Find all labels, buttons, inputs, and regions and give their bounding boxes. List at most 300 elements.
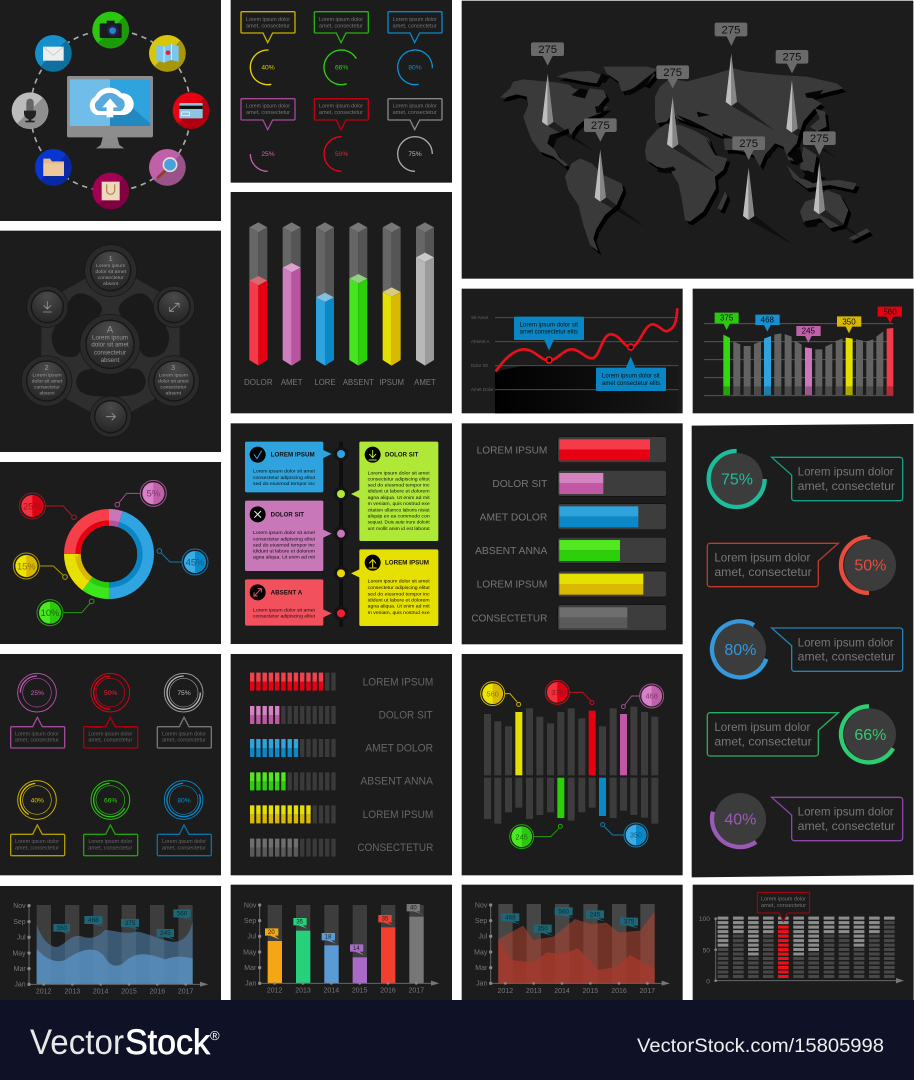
value tags: 245 <box>160 930 171 937</box>
gauge: 40% yellow: 40% <box>31 797 44 804</box>
callout: red 50%: amet, consectetur <box>319 110 363 116</box>
label 468 <box>621 684 664 709</box>
box: dolor sit pink: agna aliqua. Ut enim ad mit <box>253 555 316 561</box>
gauge: 66% green: amet, consectetur <box>88 845 133 851</box>
callout: yellow 40%: 40% <box>261 65 275 72</box>
pin: australia: 275 <box>810 133 829 145</box>
callout: grey 75% <box>388 99 442 171</box>
node: A: dolor sit amet <box>91 343 129 349</box>
coloured bars <box>723 328 893 395</box>
axes: 2015 <box>121 989 137 996</box>
label 350 <box>601 823 648 847</box>
callout: blue 80% <box>388 12 442 88</box>
logo: ® <box>210 1028 220 1043</box>
box: lorem ipsum blue <box>245 442 332 492</box>
node: 2: absent <box>39 390 55 395</box>
column: lore <box>314 222 336 387</box>
node: 3: consectetur <box>160 384 187 389</box>
panel: horizontal progress bars <box>462 423 683 644</box>
panel: line chart <box>462 289 683 413</box>
axes: May <box>12 950 26 957</box>
box: dolor sit green: sed do eiusmod tempor inc <box>368 483 430 489</box>
value tags: 245 <box>590 911 601 918</box>
row: absent anna <box>475 537 667 563</box>
value tags: 468 <box>88 917 99 924</box>
label 10%: 10% <box>41 608 59 618</box>
node: 1: Lorem ipsum <box>96 263 125 268</box>
row: lorem ipsum <box>250 676 433 688</box>
axes: Jan <box>14 982 26 989</box>
axes: Jan <box>476 981 487 988</box>
pin: russia <box>715 23 775 131</box>
node: A: Lorem ipsum <box>92 335 128 341</box>
gauge: 80% blue: Lorem ipsum dolor <box>162 839 206 845</box>
node: arrow icon <box>90 396 131 437</box>
row: amet dolor <box>480 504 667 530</box>
column: amet: AMET <box>281 377 302 387</box>
panel: equalizer chart <box>693 885 914 1000</box>
grid lines <box>495 318 678 390</box>
box: lorem ipsum blue: LOREM IPSUM <box>271 452 315 459</box>
grey bars <box>484 707 658 824</box>
panel: percentage discs with callouts <box>692 424 913 877</box>
axes: Nov <box>13 903 26 910</box>
axis labels: Sit Amet <box>471 315 489 320</box>
label 10% <box>37 599 94 626</box>
item: 75% teal: 75% <box>721 472 753 489</box>
callout lower: Lorem ipsum dolor sit <box>602 374 660 380</box>
callout: green 66%: 66% <box>335 65 348 72</box>
axes: 2017 <box>178 989 194 996</box>
row: lorem ipsum <box>477 571 667 597</box>
front area <box>37 949 193 984</box>
axes: 2014 <box>93 989 109 996</box>
box: lorem ipsum yellow: Lorem ipsum dolor sit amet <box>368 579 430 585</box>
logo: Vector <box>30 1023 124 1062</box>
node: download icon <box>27 286 68 327</box>
axis labels <box>471 315 494 392</box>
item: 50% red <box>707 537 897 593</box>
row: lorem ipsum: LOREM IPSUM <box>477 445 547 456</box>
node: 1 <box>85 245 137 297</box>
item: 50% red: Lorem ipsum dolor <box>714 552 810 565</box>
pin: russia: 275 <box>722 24 740 36</box>
label 245 <box>510 824 562 849</box>
item: 40% purple: amet, consectetur <box>798 820 895 833</box>
row: amet dolor <box>250 743 433 755</box>
value tags: 40 <box>410 906 417 912</box>
callout: grey 75%: 75% <box>408 151 422 158</box>
axes: May <box>474 949 488 956</box>
callout lower <box>596 357 666 391</box>
label 25% <box>19 493 76 520</box>
red curve <box>496 308 677 372</box>
gauge: 50% red <box>84 673 138 748</box>
axes: Mar <box>244 965 257 972</box>
axes: Jul <box>17 935 26 942</box>
markers <box>546 344 634 363</box>
item: 66% green <box>707 696 907 773</box>
node: 2: consectetur <box>34 384 60 389</box>
value tags: 35 <box>296 920 304 926</box>
gauge: 80% blue <box>157 779 211 856</box>
column: amet: AMET <box>414 377 436 387</box>
row: dolor sit <box>250 709 433 721</box>
node: 1: 1 <box>109 254 113 263</box>
panel: mirrored bar chart <box>462 654 683 875</box>
callout: grey 75%: amet, consectetur <box>393 110 437 116</box>
callout: pink 25% <box>241 99 295 171</box>
box: dolor sit green: aliquip ex ea commodo con <box>368 513 430 519</box>
icon: credit card <box>173 92 209 129</box>
label 375: 375 <box>551 688 563 697</box>
column segments <box>723 917 889 979</box>
pin: africa: 275 <box>663 67 682 79</box>
axes: 0 <box>706 979 710 986</box>
callout: blue 80%: Lorem ipsum dolor <box>393 17 437 23</box>
box: dolor sit pink: Lorem ipsum dolor sit amet <box>253 530 316 536</box>
callout upper <box>514 317 584 351</box>
item: 80% blue: Lorem ipsum dolor <box>798 636 894 649</box>
value tags: 350 <box>537 926 548 933</box>
gauge: 80% blue: 80% <box>177 797 191 804</box>
row: amet dolor: AMET DOLOR <box>365 743 433 755</box>
box: dolor sit green: agna aliqua. Ut enim ad mit <box>368 495 430 501</box>
icon: microphone <box>12 92 48 129</box>
panel: ring gauges <box>0 654 221 875</box>
gauge: 25% pink: 25% <box>31 690 44 697</box>
column: absent <box>343 222 374 387</box>
panel: 3d column chart <box>231 192 452 413</box>
tag 245 <box>796 326 821 343</box>
dark base area <box>495 366 678 413</box>
tag 468 <box>755 315 780 332</box>
callout: red 50% <box>314 99 368 171</box>
column: dolor: DOLOR <box>244 377 273 387</box>
box: dolor sit pink: DOLOR SIT <box>271 511 304 518</box>
node: 3: Lorem ipsum <box>159 372 188 377</box>
pin: south america: 275 <box>591 120 610 132</box>
value tags <box>53 909 192 940</box>
axes: 2016 <box>150 989 165 996</box>
node: A <box>80 314 140 374</box>
pin: north america: 275 <box>538 44 557 56</box>
box: lorem ipsum yellow: sed do eiusmod tempor inc <box>368 591 430 597</box>
gauge: 50% red: 50% <box>104 690 117 697</box>
callout: blue 80%: amet, consectetur <box>393 23 437 29</box>
value tags: 350 <box>56 925 67 932</box>
front area <box>498 939 655 983</box>
grid lines <box>704 324 893 396</box>
box: dolor sit green: m veniam, quis nostrud exe <box>368 501 430 507</box>
label 350: 350 <box>630 831 642 840</box>
axis labels: Dolor Sit <box>471 363 488 368</box>
column: ipsum: IPSUM <box>379 377 404 387</box>
tag 560: 560 <box>883 308 897 317</box>
pin: east asia <box>776 50 837 158</box>
tag 245: 245 <box>802 327 816 336</box>
pin: south america <box>584 118 645 227</box>
item: 50% red: amet, consectetur <box>714 566 812 579</box>
axes: May <box>243 949 257 956</box>
panel: value bar chart <box>693 289 914 413</box>
box: dolor sit pink: ididunt ut labore et dolorem <box>253 549 315 555</box>
item: 75% teal <box>709 451 903 507</box>
axes: Sep <box>244 918 256 925</box>
callout upper: amet consectetur elits <box>520 330 578 336</box>
item: 75% teal: Lorem ipsum dolor <box>798 466 894 479</box>
callout: pink 25%: Lorem ipsum dolor <box>246 104 290 110</box>
donut <box>72 517 146 591</box>
highlighted bars <box>515 711 627 818</box>
box: dolor sit green <box>351 442 438 541</box>
item: 66% green: 66% <box>854 727 886 744</box>
gauge: 25% pink <box>11 673 65 748</box>
panel: donut chart <box>0 462 221 644</box>
row: absent anna: ABSENT ANNA <box>475 546 547 557</box>
box: dolor sit green: citation ullamco laboris nisiut <box>368 507 430 513</box>
box: dolor sit green: DOLOR SIT <box>385 452 418 459</box>
box: dolor sit pink: sed do eiusmod tempor inc <box>253 542 316 548</box>
grey bars <box>733 331 883 395</box>
tag 350: 350 <box>842 317 856 326</box>
stripes <box>37 905 193 984</box>
box: lorem ipsum blue: sed do eiusmod tempor inc <box>253 481 316 487</box>
axes: Nov <box>475 902 488 909</box>
node: 1: dolor sit amet <box>95 269 127 274</box>
row: absent anna: ABSENT ANNA <box>360 776 434 788</box>
axes: 2012 <box>36 989 52 996</box>
axes: Sep <box>13 919 26 926</box>
axes: Mar <box>14 966 26 973</box>
axes: Jul <box>478 934 488 941</box>
item: 75% teal: amet, consectetur <box>798 480 895 493</box>
pin: africa <box>656 65 717 173</box>
icon: shopping bag <box>92 173 129 209</box>
axes: 2013 <box>65 989 80 996</box>
box: lorem ipsum yellow <box>351 549 438 626</box>
column: ipsum <box>379 222 404 387</box>
icon: monitor with cloud upload <box>67 76 153 148</box>
node: resize icon <box>153 286 195 327</box>
panel: blue area chart <box>0 886 221 1000</box>
gauge: 40% yellow: amet, consectetur <box>15 845 59 851</box>
box: lorem ipsum blue: consectetur adipiscing elitut <box>253 475 316 481</box>
panel: segmented level bars <box>231 654 452 875</box>
pin: east asia: 275 <box>783 52 801 64</box>
pin: indian ocean <box>732 136 793 245</box>
world map <box>500 67 873 255</box>
box: lorem ipsum yellow: m veniam, quis nostrud exe <box>368 610 430 616</box>
columns <box>268 917 424 983</box>
axes: 2015 <box>583 988 598 995</box>
node: 2: dolor sit amet <box>32 378 63 383</box>
back area <box>498 912 655 983</box>
gauge: 50% red: Lorem ipsum dolor <box>88 731 133 737</box>
label 245: 245 <box>516 832 528 841</box>
panel: timeline boxes <box>231 423 452 644</box>
value tags: 375 <box>125 920 136 927</box>
box: lorem ipsum yellow: ididunt ut labore et dolorem <box>368 597 430 603</box>
node: 1: absent <box>103 281 119 286</box>
gauge: 40% yellow: Lorem ipsum dolor <box>15 839 59 845</box>
icon: map <box>149 35 186 72</box>
pin: north america <box>531 42 593 151</box>
row: dolor sit: DOLOR SIT <box>379 709 433 721</box>
box: absent a red: ABSENT A <box>271 589 303 596</box>
box: dolor sit green: consectetur adipiscing elitut <box>368 476 430 482</box>
box: absent a red <box>245 579 332 626</box>
axes: 2016 <box>611 988 627 995</box>
value tags <box>265 904 423 955</box>
value tags: 560 <box>177 910 188 917</box>
back area <box>37 922 193 984</box>
icon: magnifier <box>149 149 186 186</box>
image id: VectorStock.com/15805998 <box>637 1036 884 1057</box>
item: 80% blue: 80% <box>724 642 756 659</box>
axes: Jan <box>245 981 256 988</box>
gauge: 75% grey <box>157 673 211 748</box>
axis labels: Absent A <box>471 339 491 344</box>
callout: yellow 40%: Lorem ipsum dolor <box>246 17 290 23</box>
box: dolor sit green: Lorem ipsum dolor sit amet <box>368 470 430 476</box>
axes: 2017 <box>640 988 655 995</box>
value tags: 35 <box>382 917 389 923</box>
row: lorem ipsum: LOREM IPSUM <box>363 676 433 688</box>
gauge: 66% green <box>84 777 138 856</box>
callout: grey 75%: Lorem ipsum dolor <box>393 104 437 110</box>
row: consectetur: CONSECTETUR <box>471 613 547 624</box>
column: amet <box>281 222 302 387</box>
row: lorem ipsum: LOREM IPSUM <box>363 809 433 821</box>
node: 2: Lorem ipsum <box>32 372 62 377</box>
panel: red area chart <box>462 885 683 1000</box>
row: absent anna <box>250 776 434 788</box>
panel: icons around monitor <box>0 0 221 221</box>
axes: 2012 <box>498 988 513 995</box>
node: 3 <box>149 356 199 406</box>
axes: 2012 <box>267 988 283 995</box>
logo: Stock <box>125 1023 210 1062</box>
axes: 2014 <box>554 988 570 995</box>
box: dolor sit pink: consectetur adipiscing elitut <box>253 536 316 542</box>
item: 40% purple <box>701 780 903 858</box>
tag 468: 468 <box>761 316 775 325</box>
node: A: absent <box>101 358 120 364</box>
label 375 <box>545 680 594 705</box>
value tags: 375 <box>624 919 635 926</box>
node: A: consectetur <box>94 350 126 356</box>
callout: green 66%: Lorem ipsum dolor <box>319 17 363 23</box>
callout <box>757 892 810 922</box>
node: 2: 2 <box>45 363 49 372</box>
item: 66% green: amet, consectetur <box>714 735 812 748</box>
box: dolor sit green: ididunt ut labore et dolorem <box>368 489 430 495</box>
gauge: 75% grey: amet, consectetur <box>162 738 206 744</box>
value tags: 20 <box>268 930 275 936</box>
callout: yellow 40% <box>241 12 295 88</box>
timeline spine <box>334 442 348 627</box>
row: lorem ipsum <box>250 809 433 821</box>
row: dolor sit <box>492 470 667 496</box>
callout: pink 25%: amet, consectetur <box>246 110 290 116</box>
bar base shade <box>723 378 893 404</box>
axes: 2013 <box>526 988 542 995</box>
axes: 100 <box>699 916 710 923</box>
axes: Sep <box>475 918 487 925</box>
label 15%: 15% <box>17 561 36 571</box>
callout: yellow 40%: amet, consectetur <box>246 23 290 29</box>
box: dolor sit pink <box>245 501 332 571</box>
node: 3: absent <box>166 390 182 395</box>
gauge: 66% green: 66% <box>104 797 117 804</box>
node: A: A <box>107 324 114 334</box>
pin: australia <box>803 131 863 239</box>
panel: six callouts with arcs <box>231 0 452 183</box>
axes: 2017 <box>409 988 424 995</box>
box: lorem ipsum blue: Lorem ipsum dolor sit amet <box>253 469 316 475</box>
value tags: 560 <box>558 908 569 915</box>
box: dolor sit green: sequat. Duis aute irure dolorit <box>368 520 430 526</box>
box: dolor sit green: unt mollit anim id est laborut <box>368 526 430 532</box>
tag 375: 375 <box>720 314 734 323</box>
label 45%: 45% <box>186 557 204 567</box>
box: absent a red: consectetur adipiscing elitut <box>253 614 316 620</box>
logo <box>30 1023 220 1062</box>
value tags: 18 <box>325 935 332 941</box>
gauge: 66% green: Lorem ipsum dolor <box>88 839 133 845</box>
axis labels: Amet Dolor <box>471 387 494 392</box>
label 5% <box>115 480 166 507</box>
item: 80% blue: amet, consectetur <box>798 651 895 664</box>
column: lore: LORE <box>314 377 336 387</box>
label 25%: 25% <box>23 501 42 511</box>
callout: green 66%: amet, consectetur <box>319 23 363 29</box>
label 5%: 5% <box>147 489 160 499</box>
label 468: 468 <box>646 692 658 701</box>
callout: Lorem ipsum dolor <box>761 896 806 902</box>
footer bar <box>0 1000 914 1080</box>
column: dolor <box>244 222 273 387</box>
tag 350 <box>837 316 861 333</box>
gauge: 75% grey: 75% <box>177 690 191 697</box>
callout: red 50%: 50% <box>335 151 348 158</box>
gauge: 25% pink: Lorem ipsum dolor <box>15 731 59 737</box>
label 560: 560 <box>487 689 499 698</box>
value tags <box>501 907 639 936</box>
node: 3: dolor sit amet <box>158 378 189 383</box>
callout: pink 25%: 25% <box>261 151 275 158</box>
axes: 2013 <box>295 988 311 995</box>
value tags: 14 <box>353 946 360 952</box>
gauge: 50% red: amet, consectetur <box>88 738 133 744</box>
column: amet <box>414 222 436 387</box>
callout: green 66% <box>314 12 368 89</box>
icon: envelope <box>35 35 72 72</box>
gauge: 40% yellow <box>11 777 65 856</box>
callout: red 50%: Lorem ipsum dolor <box>319 104 363 110</box>
connector web <box>47 271 174 417</box>
box: lorem ipsum yellow: LOREM IPSUM <box>385 559 429 566</box>
column: absent: ABSENT <box>343 377 374 387</box>
row: lorem ipsum: LOREM IPSUM <box>477 580 547 591</box>
icon: camera <box>92 12 129 48</box>
gauge: 25% pink: amet, consectetur <box>15 738 59 744</box>
row: consectetur: CONSECTETUR <box>357 842 434 854</box>
box: lorem ipsum yellow: agna aliqua. Ut enim ad mit <box>368 604 430 610</box>
axes <box>474 902 670 995</box>
box: absent a red: Lorem ipsum dolor sit amet <box>253 607 316 613</box>
